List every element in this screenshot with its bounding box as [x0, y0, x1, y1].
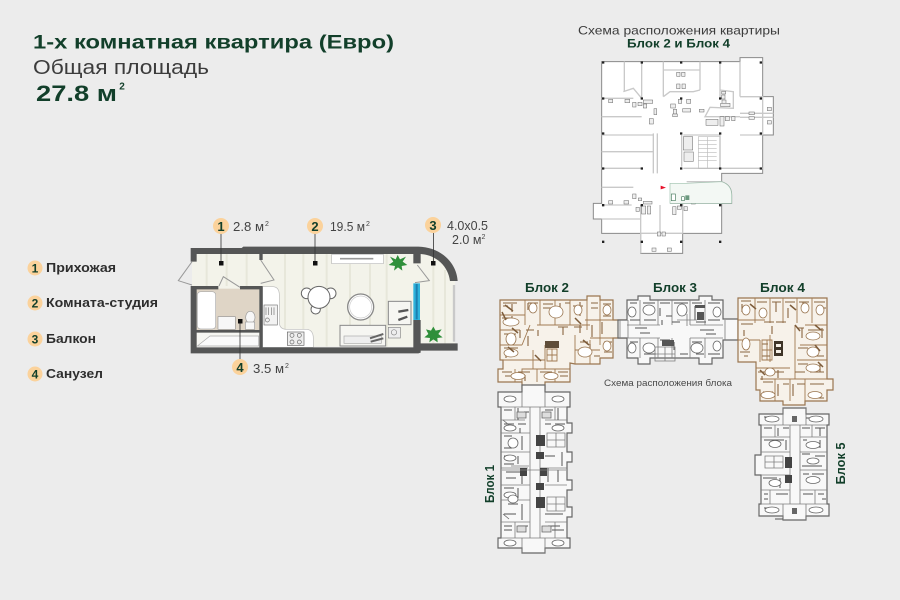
subtitle: total area: Общая площадь: [33, 56, 209, 79]
area value: 2: [119, 82, 125, 92]
laundry unit: [197, 336, 259, 346]
marker 4 with area: 3.5 м: [253, 362, 284, 376]
marker 1 with area: [213, 218, 269, 266]
marker 4 with area: 4: [236, 360, 244, 375]
entrance and balcony doors: [178, 260, 429, 287]
room dividers: [602, 62, 773, 253]
block 5 plan: [755, 408, 829, 520]
area value: 27.8 м: [36, 81, 117, 106]
balcony glazing: [450, 285, 457, 342]
legend item 4: Санузел: [46, 367, 103, 381]
marker 3 with area: 3: [429, 218, 437, 233]
label: block 1: Блок 1: [483, 465, 497, 503]
label: block 5: Блок 5: [834, 442, 848, 484]
dining table: [301, 286, 336, 314]
marker 3 with area: 2.0 м: [452, 233, 481, 247]
marker 1 with area: 1: [217, 219, 225, 234]
armchair: [388, 301, 411, 325]
legend item 2: 2: [32, 296, 39, 310]
legend item 3: 3: [32, 332, 39, 346]
legend item 3: [28, 332, 96, 346]
plants: [389, 255, 443, 342]
caption: block scheme: Схема расположения блока: [604, 378, 732, 388]
legend item 4: 4: [32, 368, 39, 382]
block 3 plan: [618, 296, 738, 364]
sofa: [340, 325, 386, 346]
label: block 4: Блок 4: [760, 281, 805, 295]
legend: [28, 260, 158, 382]
bathtub: [197, 292, 216, 329]
floor: wood: [192, 253, 455, 347]
marker 3 with area: 2: [481, 234, 485, 241]
kitchen counter: [263, 287, 313, 347]
structural columns: [602, 61, 762, 243]
sink unit: [264, 305, 277, 325]
wet-room fixtures: [609, 72, 771, 251]
marker 2 with area: 19.5 м: [330, 220, 365, 234]
marker 2 with area: 2: [366, 221, 370, 228]
marker 4 with area: 2: [285, 363, 289, 370]
label: block 3: Блок 3: [653, 281, 697, 295]
legend item 1: 1: [32, 262, 39, 276]
legend item 1: Прихожая: [46, 261, 116, 275]
marker 4 with area: [232, 319, 289, 376]
highlighted apartment: [670, 182, 732, 203]
label: block 2: Блок 2: [525, 281, 569, 295]
side table: [388, 327, 400, 338]
bathroom floor: [197, 289, 259, 331]
block 1 plan: [498, 385, 572, 553]
round rug: [348, 294, 374, 320]
marker 1 with area: 2: [265, 221, 269, 228]
marker 3 with area: 4.0x0.5: [447, 219, 488, 233]
title: 1-х комнатная квартира (Евро): [33, 32, 394, 54]
apartment location heading: Схема расположения квартиры: [578, 24, 780, 38]
block 2 plan: [498, 296, 627, 389]
sink and toilet: [218, 311, 255, 329]
apartment location heading: Блок 2 и Блок 4: [627, 36, 730, 50]
marker 2 with area: 2: [311, 219, 319, 234]
floor key plan: [593, 58, 773, 253]
marker 2 with area: [307, 218, 370, 266]
legend item 1: [28, 260, 116, 276]
legend item 2: Комната-студия: [46, 296, 158, 310]
block 4 plan: [738, 298, 833, 405]
core: lift and stairs: [698, 137, 720, 168]
apartment floor plan: [178, 247, 458, 353]
location arrow: [661, 186, 666, 189]
walls: [191, 247, 458, 353]
legend item 3: Балкон: [46, 332, 96, 346]
window blue: [413, 283, 420, 320]
marker 1 with area: 2.8 м: [233, 220, 264, 234]
hob: [287, 332, 304, 345]
tv console: [332, 254, 383, 264]
marker 3 with area: [425, 217, 488, 266]
apartment location heading: [578, 24, 780, 50]
legend item 4: [28, 366, 103, 382]
